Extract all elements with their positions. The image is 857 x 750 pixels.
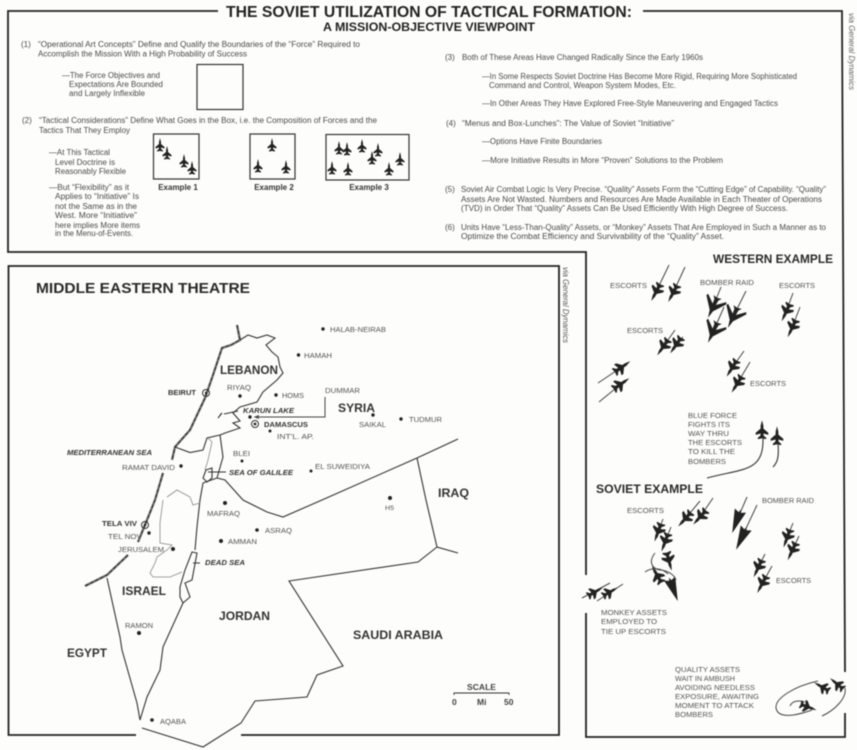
text block: point 1 [21, 40, 361, 98]
text: blue force: BLUE FORCE [688, 411, 737, 420]
text block: points 3 to 6: (TVD) in Order That “Quality” Assets Can Be Used Efficiently With High Degree of Success. [461, 204, 788, 213]
map: city markers [137, 327, 403, 722]
dogfight curves [645, 553, 676, 580]
map: Dummar arrow [255, 397, 325, 418]
western labels: ESCORTS [627, 326, 663, 335]
empty force box [197, 64, 243, 110]
text block: point 2: not the Same as in the [55, 202, 138, 211]
map: water labels: KARUN LAKE [243, 406, 295, 415]
text block: point 2: Level Doctrine is [55, 158, 115, 167]
text: blue force: TO KILL THE [688, 447, 735, 456]
text: quality assets: EXPOSURE, AWAITING [675, 692, 759, 701]
western labels: ESCORTS [610, 281, 647, 290]
text block: point 1: Accomplish the Mission With a High Probability of Success [38, 50, 247, 58]
text block: points 3 to 6: —More Initiative Results in More “Proven” Solutions to the Problem [482, 156, 723, 165]
map: city labels: AQABA [160, 717, 186, 726]
map: city labels: H5 [385, 506, 395, 512]
text block: point 1: Expectations Are Bounded [69, 80, 163, 89]
map: city labels: DUMMAR [325, 386, 361, 395]
example 2 [250, 134, 295, 192]
text block: point 1: “Operational Art Concepts” Define and Qualify the Boundaries of the “Force” Required to [38, 40, 361, 49]
text block: points 3 to 6: Optimize the Combat Efficiency and Survivability of the “Quality” Asset. [461, 232, 724, 241]
credit: top panel: via General Dynamics [847, 13, 856, 90]
map: city labels: RIYAQ [227, 383, 251, 392]
soviet labels: ESCORTS [627, 506, 664, 515]
text block: point 1: —The Force Objectives and [62, 71, 160, 80]
text: monkey assets: EMPLOYED TO [601, 617, 657, 626]
text block: points 3 to 6: Soviet Air Combat Logic Is Very Precise. “Quality” Assets Form the “Cutting Edge” of Capability. “Quality” [461, 185, 826, 194]
map: city labels: RAMON [125, 621, 153, 630]
text block: points 3 to 6: —In Some Respects Soviet Doctrine Has Become More Rigid, Requiring More Sophisticated [482, 72, 797, 81]
text block: point 2: —At This Tactical [49, 148, 110, 157]
map: west bank outline [150, 438, 212, 577]
text: blue force: FIGHTS ITS [688, 420, 730, 429]
soviet labels: ESCORTS [776, 576, 811, 585]
soviet labels [627, 496, 815, 585]
text: quality assets: WAIT IN AMBUSH [675, 674, 735, 683]
text block: point 2: in the Menu-of-Events. [55, 229, 133, 238]
text block: points 3 to 6: Both of These Areas Have Changed Radically Since the Early 1960s [462, 53, 703, 62]
ambush orbit and planes [776, 674, 847, 716]
western labels: ESCORTS [750, 379, 786, 388]
text block: point 2: —But “Flexibility” as it [49, 183, 130, 192]
title: A MISSION-OBJECTIVE VIEWPOINT [323, 20, 535, 34]
map: city labels: INT'L. AP. [277, 432, 314, 441]
map: city labels: TUDMUR [409, 415, 443, 424]
map: country labels: JORDAN [219, 609, 270, 623]
text block: points 3 to 6: (4) [446, 119, 456, 128]
text block: points 3 to 6: Units Have “Less-Than-Quality” Assets, or “Monkey” Assets That Are Employed in Such a Manner as to [461, 223, 827, 232]
map: city labels: JERUSALEM [118, 545, 164, 554]
text block: point 2: Tactics That They Employ [39, 126, 130, 135]
map: country labels [67, 363, 469, 660]
blue force planes and curved arrows [707, 420, 783, 478]
text block: points 3 to 6: (3) [445, 53, 455, 62]
text block: point 2: (2) [22, 116, 32, 125]
western labels: ESCORTS [779, 281, 815, 290]
title: THE SOVIET UTILIZATION OF TACTICAL FORMATION: [226, 4, 632, 21]
map: country labels: IRAQ [438, 486, 469, 500]
text: blue force [688, 411, 742, 466]
example 1: Example 1 [158, 183, 198, 192]
soviet heading: SOVIET EXAMPLE [596, 482, 703, 496]
map: scale bar: 50 [504, 697, 514, 707]
text: monkey assets [601, 608, 667, 636]
map: city labels: EL SUWEIDIYA [315, 462, 370, 471]
map: scale bar: SCALE [467, 682, 496, 692]
map: water labels: SEA OF GALILEE [229, 468, 294, 477]
map: city labels: SAIKAL [359, 420, 386, 429]
text: blue force: WAY THRU [688, 429, 729, 438]
map: city labels [102, 325, 443, 726]
map: city labels: HOMS [282, 391, 304, 400]
text: quality assets: AVOIDING NEEDLESS [675, 683, 755, 692]
map: country labels: EGYPT [67, 646, 108, 660]
text: quality assets: BOMBERS [675, 710, 713, 719]
text block: point 2 [22, 116, 378, 238]
text block: point 2: “Tactical Considerations” Define What Goes in the Box, i.e. the Composition of Forces and the [39, 116, 378, 125]
map: water labels: MEDITERRANEAN SEA [67, 448, 152, 457]
text block: points 3 to 6 [445, 53, 827, 241]
example 2: Example 2 [254, 183, 294, 192]
map: city labels: BEIRUT [168, 388, 196, 397]
text block: points 3 to 6: —Options Have Finite Boundaries [482, 137, 602, 146]
map: city labels: BLEI [233, 449, 250, 458]
credit: map panel: via General Dynamics [561, 267, 570, 343]
text block: points 3 to 6: —In Other Areas They Have Explored Free-Style Maneuvering and Engaged Tactics [482, 99, 778, 108]
map: city labels: HALAB-NEIRAB [330, 325, 386, 334]
text block: point 2: West. More “Initiative” [55, 211, 137, 220]
text: blue force: BOMBERS [688, 457, 726, 466]
map: city labels: TEL NOV [108, 532, 142, 541]
map: water labels: DEAD SEA [205, 558, 245, 567]
map: city labels: MAFRAQ [207, 509, 240, 518]
western labels: BOMBER RAID [700, 278, 755, 287]
text block: points 3 to 6: Assets Are Not Wasted. Numbers and Resources Are Made Available in Each Theater of Operations [461, 195, 822, 204]
map: city labels: HAMAH [304, 351, 332, 360]
text: monkey assets: MONKEY ASSETS [601, 608, 667, 617]
map: coastline [85, 325, 240, 586]
example 3: Example 3 [349, 183, 389, 192]
text: quality assets: MOMENT TO ATTACK [675, 701, 754, 710]
map: scale bar: Mi [477, 697, 486, 707]
text block: points 3 to 6: (6) [445, 223, 455, 232]
panel: middle eastern theatre map [8, 266, 570, 747]
text: quality assets: QUALITY ASSETS [675, 665, 740, 674]
western escorts and blue force [610, 281, 802, 396]
western contrails [598, 265, 800, 402]
map: country labels: LEBANON [220, 363, 278, 377]
western labels [610, 278, 815, 388]
map: city labels: DAMASCUS [264, 420, 308, 429]
map: city labels: TELA VIV [102, 519, 137, 528]
panel: soviet example [582, 482, 847, 719]
map: country labels: SAUDI ARABIA [353, 628, 443, 642]
text block: point 2: here implies More items [55, 221, 140, 230]
map heading: MIDDLE EASTERN THEATRE [36, 280, 250, 297]
example 1 [154, 134, 199, 192]
map: city labels: AMMAN [228, 537, 257, 546]
text block: points 3 to 6: Command and Control, Weapon System Modes, Etc. [489, 81, 676, 90]
text block: point 2: Reasonably Flexible [55, 167, 127, 176]
text block: points 3 to 6: “Menus and Box-Lunches”: The Value of Soviet “Initiative” [462, 119, 674, 128]
western heading: WESTERN EXAMPLE [713, 254, 833, 266]
map: scale bar [452, 682, 514, 707]
map: borders [107, 335, 458, 747]
map: city labels: ASRAQ [265, 526, 292, 535]
text block: points 3 to 6: (5) [445, 185, 455, 194]
example 3 [326, 134, 409, 192]
text block: point 1: (1) [21, 40, 31, 49]
title [226, 4, 632, 34]
map: water labels [67, 406, 295, 567]
map: city labels: RAMAT DAVID [122, 463, 176, 472]
soviet planes [585, 506, 802, 603]
text: blue force: THE ESCORTS [688, 438, 742, 447]
map: scale bar: 0 [452, 697, 457, 707]
text: quality assets [675, 665, 759, 719]
soviet labels: BOMBER RAID [762, 496, 815, 505]
text: monkey assets: TIE UP ESCORTS [601, 627, 666, 636]
map: country labels: ISRAEL [122, 584, 166, 598]
map: country labels: SYRIA [338, 401, 375, 415]
text block: point 2: Applies to “Initiative” Is [55, 192, 139, 201]
panel: western example [598, 254, 833, 478]
soviet contrails [582, 497, 799, 601]
text block: point 1: and Largely Inflexible [69, 89, 146, 98]
